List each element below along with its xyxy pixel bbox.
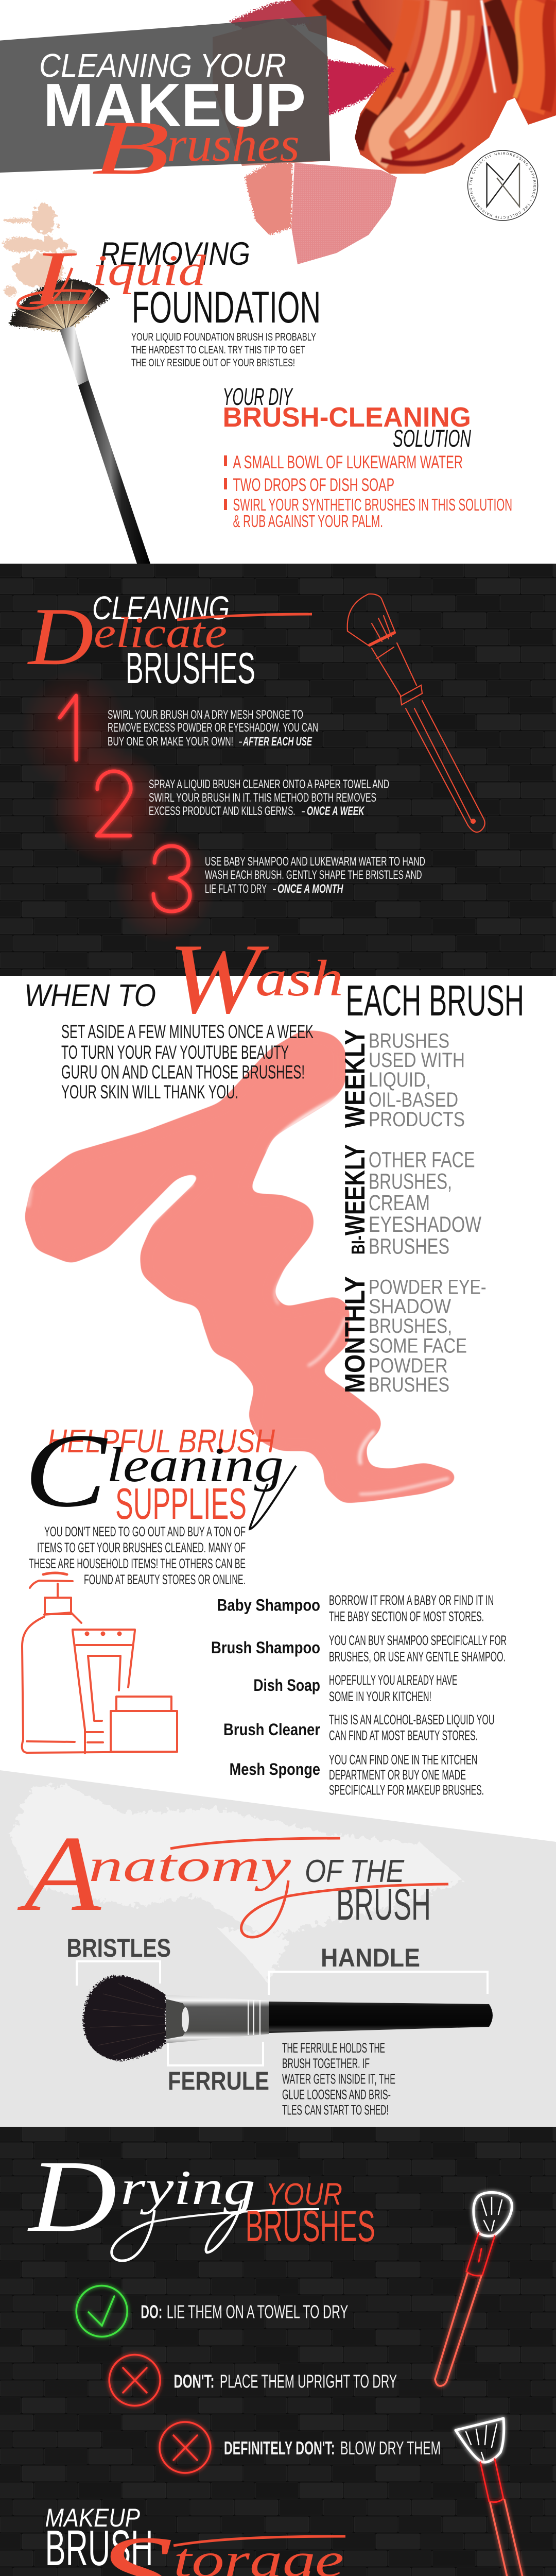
schedule: monthly bbox=[339, 1276, 486, 1396]
neon number 2 bbox=[97, 771, 131, 836]
supply: dish soap: HOPEFULLY YOU ALREADY HAVE bbox=[329, 1672, 457, 1688]
panel: anatomy grey background bbox=[0, 1770, 556, 2127]
supply: mesh sponge: Mesh Sponge bbox=[230, 1760, 320, 1778]
illustration: powder brush bbox=[83, 1976, 493, 2061]
heading: removing liquid foundation bbox=[18, 235, 321, 332]
text block: when to wash intro: SET ASIDE A FEW MINUTES ONCE A WEEK bbox=[61, 1021, 314, 1042]
heading: drying your brushes bbox=[27, 2140, 375, 2261]
text block: step 3: LIE FLAT TO DRY bbox=[205, 882, 267, 896]
supply: brush cleaner: Brush Cleaner bbox=[223, 1720, 320, 1739]
text block: step 2: - bbox=[301, 804, 305, 818]
schedule: weekly: USED WITH bbox=[369, 1049, 465, 1072]
heading: diy brush-cleaning solution: BRUSH-CLEANING bbox=[222, 402, 471, 433]
text block: step 2: EXCESS PRODUCT AND KILLS GERMS. bbox=[149, 804, 296, 818]
text block: step 3: - bbox=[272, 882, 276, 896]
title: B bbox=[92, 105, 170, 191]
text block: step 3: WASH EACH BRUSH. GENTLY SHAPE THE BRISTLES AND bbox=[205, 868, 422, 882]
text: do bbox=[141, 2301, 348, 2323]
callouts: bristles, handle, ferrule: BRISTLES bbox=[67, 1934, 171, 1962]
heading: helpful brush cleaning supplies: SUPPLIES bbox=[115, 1480, 247, 1529]
schedule: weekly: WEEKLY bbox=[339, 1029, 371, 1128]
heading: makeup brush storage bbox=[45, 2503, 345, 2576]
text block: supplies intro: ITEMS TO GET YOUR BRUSHES CLEANED. MANY OF bbox=[37, 1540, 246, 1555]
heading: anatomy of the brush bbox=[17, 1814, 448, 1937]
text: don't: DON'T: bbox=[174, 2371, 214, 2392]
supply: baby shampoo bbox=[217, 1592, 494, 1624]
text: don't bbox=[174, 2371, 397, 2392]
text block: foundation intro: THE OILY RESIDUE OUT OF YOUR BRISTLES! bbox=[131, 357, 295, 369]
schedule: bi-weekly: BRUSHES, bbox=[369, 1169, 452, 1194]
text block: step 1: - bbox=[238, 735, 242, 749]
heading: anatomy of the brush: OF THE bbox=[305, 1854, 405, 1889]
schedule: monthly: SHADOW bbox=[369, 1295, 451, 1318]
logo: collectiv emblem: THE COLLECTIV HAIRDRESSING EXPERIENCE • THE COLLECTIV HAIRDRESSING bbox=[470, 152, 536, 218]
heading: cleaning delicate brushes: elicate bbox=[94, 608, 227, 657]
icon: neon check bbox=[76, 2285, 127, 2337]
heading: drying your brushes: BRUSHES bbox=[246, 2202, 375, 2251]
icon: neon cross 1 bbox=[109, 2354, 160, 2406]
text: don't: PLACE THEM UPRIGHT TO DRY bbox=[220, 2371, 397, 2392]
icon: neon round brush bbox=[435, 2192, 512, 2386]
text block: supplies intro: THESE ARE HOUSEHOLD ITEMS! THE OTHERS CAN BE bbox=[29, 1556, 246, 1571]
text: do: LIE THEM ON A TOWEL TO DRY bbox=[167, 2301, 348, 2323]
text block: foundation intro: YOUR LIQUID FOUNDATION BRUSH IS PROBABLY bbox=[131, 331, 316, 343]
heading: when to wash each brush bbox=[24, 923, 524, 1035]
heading: cleaning delicate brushes: BRUSHES bbox=[126, 644, 255, 693]
callouts: bristles, handle, ferrule bbox=[67, 1934, 488, 2095]
schedule: bi-weekly: CREAM bbox=[369, 1191, 430, 1215]
callouts: bristles, handle, ferrule: HANDLE bbox=[321, 1943, 420, 1972]
heading: drying your brushes: D bbox=[27, 2140, 117, 2253]
supply: dish soap: Dish Soap bbox=[253, 1676, 320, 1694]
schedule: bi-weekly: BRUSHES bbox=[369, 1234, 449, 1259]
panel: drying and storage brick wall bbox=[0, 2127, 556, 2576]
heading: drying your brushes: YOUR bbox=[266, 2177, 342, 2212]
list: solution ingredients: TWO DROPS OF DISH SOAP bbox=[233, 475, 394, 495]
heading: diy brush-cleaning solution: YOUR DIY bbox=[222, 383, 293, 410]
schedule: weekly: PRODUCTS bbox=[369, 1108, 465, 1131]
heading: removing liquid foundation: L bbox=[29, 235, 98, 321]
schedule: monthly: POWDER EYE- bbox=[369, 1276, 486, 1299]
text block: when to wash intro bbox=[61, 1021, 314, 1103]
heading: helpful brush cleaning supplies bbox=[24, 1412, 296, 1529]
heading: diy brush-cleaning solution bbox=[222, 383, 471, 452]
text block: supplies intro: YOU DON'T NEED TO GO OUT AND BUY A TON OF bbox=[44, 1524, 246, 1539]
panel: delicate brushes brick wall bbox=[0, 564, 556, 976]
text block: ferrule note bbox=[282, 2040, 395, 2117]
heading: anatomy of the brush: natomy bbox=[89, 1840, 291, 1891]
heading: drying your brushes: rying bbox=[120, 2160, 255, 2215]
supply: mesh sponge: DEPARTMENT OR BUY ONE MADE bbox=[329, 1767, 466, 1783]
heading: helpful brush cleaning supplies: C bbox=[24, 1412, 108, 1529]
illustration: fan brush bbox=[9, 279, 150, 564]
text block: step 2 bbox=[149, 777, 389, 818]
schedule: weekly bbox=[339, 1029, 465, 1131]
icon: bottle, tube and jar bbox=[22, 1573, 177, 1753]
supply: baby shampoo: Baby Shampoo bbox=[217, 1596, 320, 1615]
schedule: monthly: BRUSHES bbox=[369, 1374, 449, 1396]
text block: step 1: BUY ONE OR MAKE YOUR OWN! bbox=[108, 735, 233, 749]
text block: step 1: REMOVE EXCESS POWDER OR EYESHADOW. YOU CAN bbox=[108, 721, 318, 735]
schedule: bi-weekly: BI- bbox=[348, 1235, 369, 1255]
text block: step 2: ONCE A WEEK bbox=[307, 804, 365, 818]
schedule: monthly: MONTHLY bbox=[339, 1276, 371, 1393]
text block: step 1: AFTER EACH USE bbox=[242, 735, 312, 749]
icon: outlined brush bbox=[348, 594, 485, 832]
neon number 1 bbox=[60, 696, 76, 760]
text: definitely don't: BLOW DRY THEM bbox=[340, 2437, 441, 2459]
icon: neon cross 2 bbox=[160, 2422, 211, 2473]
schedule: bi-weekly: EYESHADOW bbox=[369, 1212, 481, 1237]
banner: translucent grey band bbox=[0, 15, 330, 173]
heading: cleaning delicate brushes: CLEANING bbox=[92, 589, 230, 626]
paint smear bbox=[288, 0, 556, 175]
text: do: DO: bbox=[141, 2301, 162, 2323]
heading: makeup brush storage: MAKEUP bbox=[45, 2503, 141, 2532]
powder texture bbox=[10, 1785, 463, 1984]
heading: anatomy of the brush: BRUSH bbox=[336, 1880, 431, 1929]
text block: ferrule note: WATER GETS INSIDE IT, THE bbox=[282, 2072, 395, 2087]
heading: cleaning delicate brushes: D bbox=[27, 590, 94, 682]
neon number 3 bbox=[153, 846, 190, 911]
schedule: weekly: LIQUID, bbox=[369, 1069, 430, 1091]
heading: when to wash each brush: WHEN TO bbox=[24, 978, 156, 1013]
heading: makeup brush storage: BRUSH bbox=[45, 2520, 153, 2576]
title bbox=[39, 47, 306, 191]
heading: helpful brush cleaning supplies: leaning bbox=[107, 1437, 284, 1492]
supply: mesh sponge bbox=[230, 1752, 484, 1798]
supply: dish soap: SOME IN YOUR KITCHEN! bbox=[329, 1689, 431, 1704]
heading: removing liquid foundation: FOUNDATION bbox=[132, 283, 321, 332]
heading: helpful brush cleaning supplies: HELPFUL BRUSH bbox=[47, 1422, 275, 1460]
supply: brush cleaner bbox=[223, 1712, 495, 1743]
icon: neon fan brush bbox=[456, 2418, 527, 2576]
text block: supplies intro: FOUND AT BEAUTY STORES OR ONLINE. bbox=[84, 1572, 246, 1587]
title: rushes bbox=[167, 117, 300, 172]
text: definitely don't: DEFINITELY DON'T: bbox=[224, 2437, 335, 2459]
title: CLEANING YOUR bbox=[39, 47, 286, 84]
text block: ferrule note: TLES CAN START TO SHED! bbox=[282, 2102, 389, 2117]
schedule: monthly: POWDER bbox=[369, 1354, 448, 1377]
heading: removing liquid foundation: REMOVING bbox=[100, 236, 250, 272]
powder pieces bbox=[229, 0, 311, 31]
list: solution ingredients bbox=[224, 452, 512, 531]
text block: step 3: ONCE A MONTH bbox=[277, 882, 343, 896]
callouts: bristles, handle, ferrule: FERRULE bbox=[168, 2066, 269, 2095]
heading: cleaning delicate brushes bbox=[27, 589, 312, 693]
supply: dish soap bbox=[253, 1672, 457, 1704]
supply: brush shampoo: Brush Shampoo bbox=[211, 1638, 320, 1657]
illustration: nail polish splash bbox=[24, 1031, 456, 1503]
illustration: loose powder bbox=[3, 204, 77, 296]
title: MAKEUP bbox=[43, 71, 306, 140]
schedule: bi-weekly bbox=[339, 1144, 481, 1259]
text block: when to wash intro: YOUR SKIN WILL THANK YOU. bbox=[61, 1081, 238, 1103]
schedule: weekly: BRUSHES bbox=[369, 1030, 449, 1053]
text block: step 3 bbox=[205, 855, 425, 896]
supply: brush shampoo bbox=[211, 1633, 507, 1664]
text block: foundation intro bbox=[131, 331, 316, 369]
text block: ferrule note: GLUE LOOSENS AND BRIS- bbox=[282, 2087, 391, 2102]
heading: when to wash each brush: W bbox=[168, 923, 269, 1035]
text block: ferrule note: BRUSH TOGETHER. IF bbox=[282, 2056, 370, 2071]
schedule: bi-weekly: OTHER FACE bbox=[369, 1148, 475, 1173]
schedule: monthly: SOME FACE bbox=[369, 1334, 467, 1357]
heading: removing liquid foundation: iquid bbox=[92, 246, 206, 295]
panel: hero paint and powder bbox=[213, 0, 556, 264]
text block: step 2: SWIRL YOUR BRUSH IN IT. THIS METHOD BOTH REMOVES bbox=[149, 791, 376, 805]
heading: when to wash each brush: ash bbox=[255, 950, 343, 1007]
text block: step 1 bbox=[108, 708, 318, 749]
text block: when to wash intro: TO TURN YOUR FAV YOUTUBE BEAUTY bbox=[61, 1042, 289, 1063]
text block: step 2: SPRAY A LIQUID BRUSH CLEANER ONTO A PAPER TOWEL AND bbox=[149, 777, 389, 791]
text block: when to wash intro: GURU ON AND CLEAN THOSE BRUSHES! bbox=[61, 1062, 305, 1083]
text block: supplies intro bbox=[29, 1524, 246, 1587]
heading: anatomy of the brush: A bbox=[17, 1814, 101, 1934]
text block: step 3: USE BABY SHAMPOO AND LUKEWARM WATER TO HAND bbox=[205, 855, 425, 869]
text block: step 1: SWIRL YOUR BRUSH ON A DRY MESH SPONGE TO bbox=[108, 708, 303, 722]
list: solution ingredients: & RUB AGAINST YOUR PALM. bbox=[233, 512, 383, 531]
neon halos behind numbers bbox=[21, 670, 216, 943]
schedule: weekly: OIL-BASED bbox=[369, 1089, 458, 1111]
schedule: monthly: BRUSHES, bbox=[369, 1315, 452, 1337]
text block: ferrule note: THE FERRULE HOLDS THE bbox=[282, 2040, 385, 2056]
schedule: bi-weekly: WEEKLY bbox=[339, 1144, 371, 1235]
text block: foundation intro: THE HARDEST TO CLEAN. TRY THIS TIP TO GET bbox=[131, 344, 305, 356]
heading: diy brush-cleaning solution: SOLUTION bbox=[393, 425, 471, 452]
